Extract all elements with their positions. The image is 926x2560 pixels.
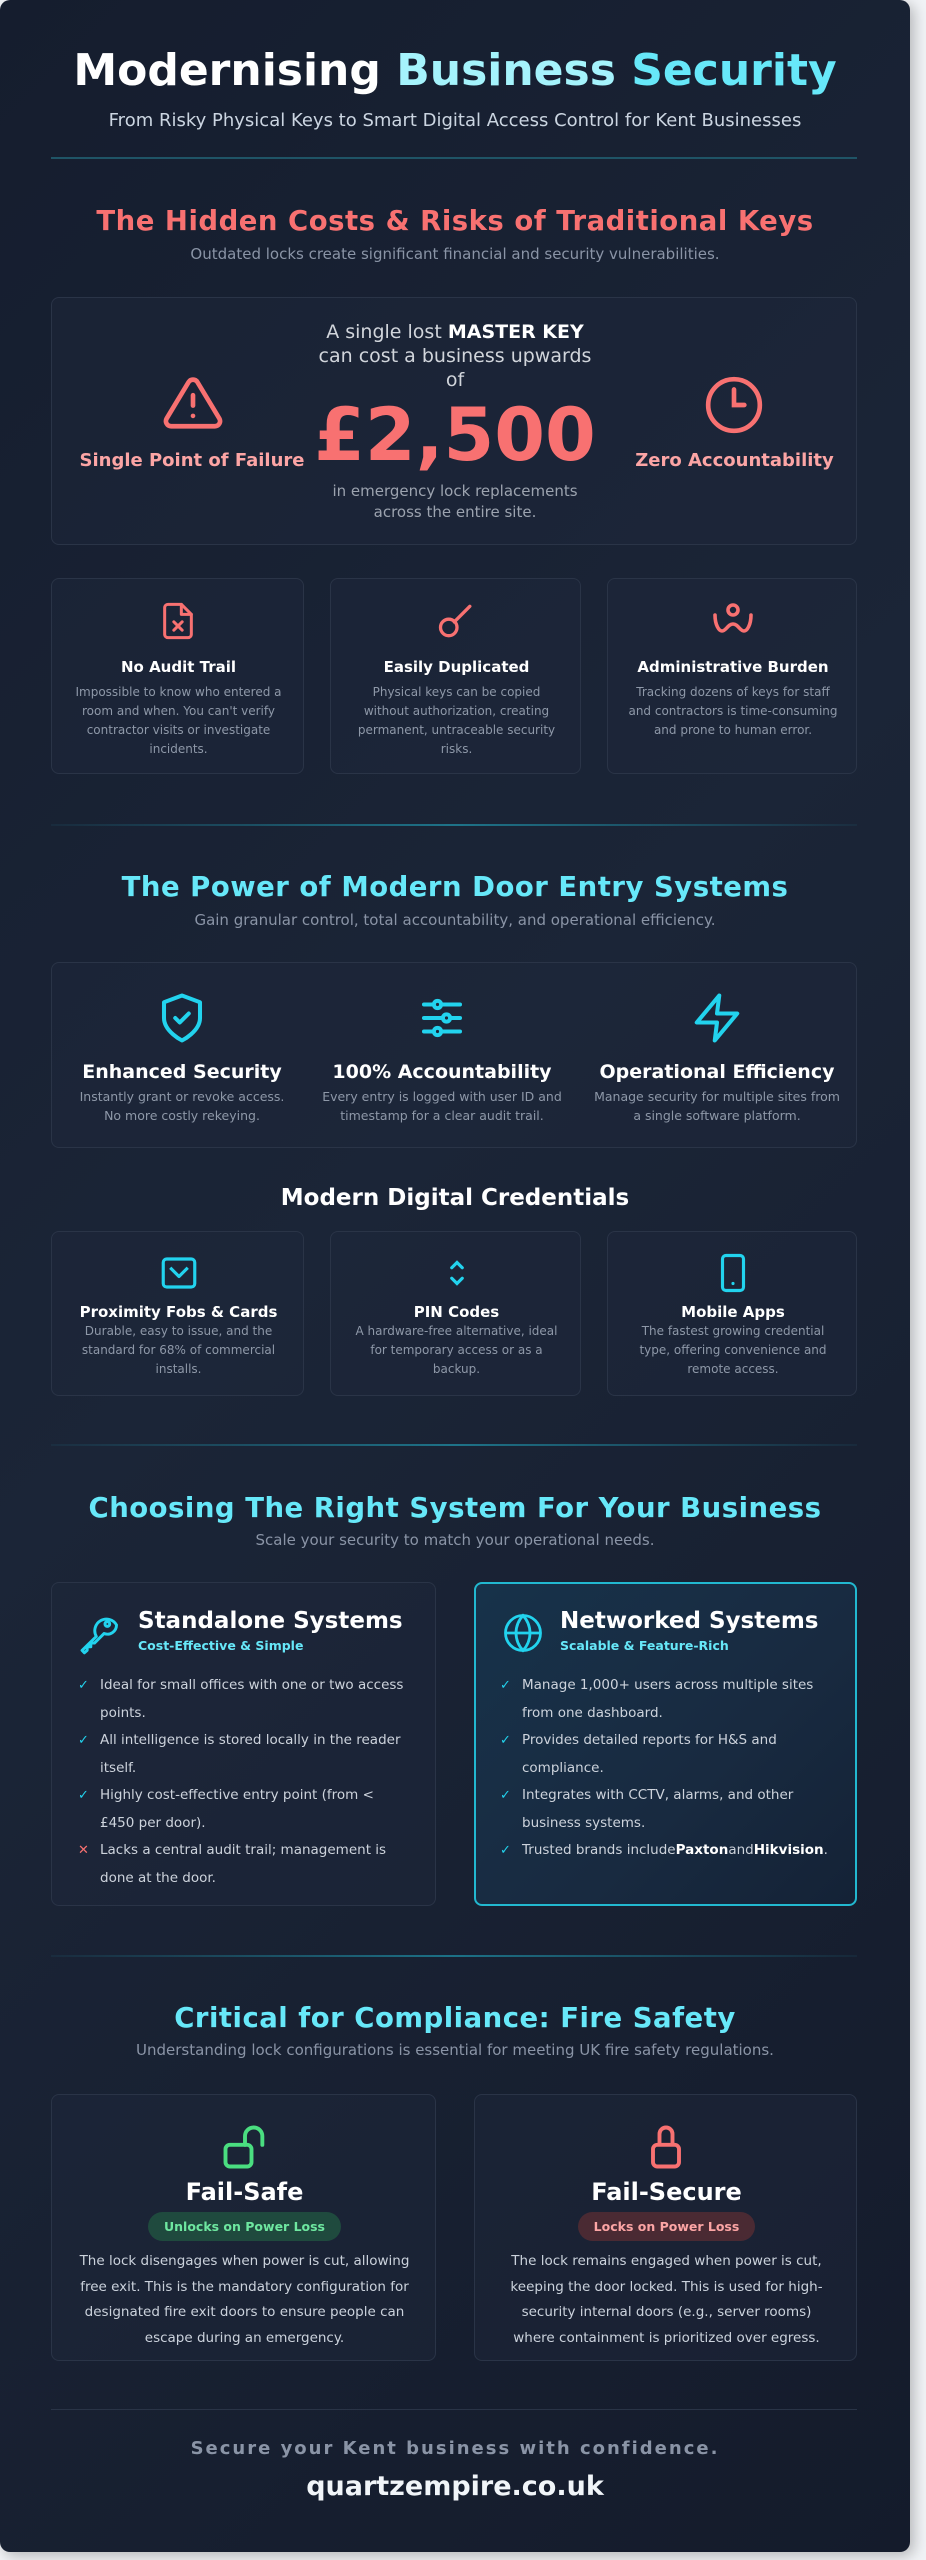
- card: PIN: PIN Codes: [414, 1303, 499, 1321]
- panel: fail-secure: [474, 2094, 857, 2361]
- icon: card: [162, 1257, 196, 1289]
- footer url: quartzempire.co.uk: [306, 2471, 604, 2502]
- card: no audit trail: [51, 578, 304, 774]
- list: networked features: [500, 1677, 828, 1858]
- panel: benefits: [51, 962, 857, 1148]
- benefit: efficiency: a single software platform.: [633, 1108, 801, 1123]
- card: fobs: [51, 1231, 304, 1396]
- icon: locked padlock: [651, 2126, 681, 2168]
- benefit: efficiency: [594, 994, 840, 1123]
- icon: person: [713, 603, 753, 633]
- heading: digital credentials: Modern Digital Credentials: [281, 1185, 629, 1211]
- card: no audit trail: Impossible to know who entered a room and when. You can't verify contractor visits or investigate incidents.: [75, 685, 282, 756]
- list: standalone features: Lacks a central audit trail; management is done at the door.: [100, 1842, 386, 1886]
- subtitle: From Risky Physical Keys to Smart Digital Access Control for Kent Businesses: [109, 110, 801, 131]
- benefit: efficiency: Operational Efficiency: [600, 1061, 834, 1083]
- list: networked features: Trusted brands includePaxtonandHikvision.: [522, 1842, 828, 1858]
- card: no audit trail: No Audit Trail: [121, 658, 236, 676]
- panel: fail-safe: The lock disengages when power is cut, allowing free exit. This is the mandatory configuration for designated fire exit doors to ensure people can escape during an emergency.: [80, 2253, 409, 2346]
- panel: fail-secure: Fail-Secure: [591, 2178, 742, 2206]
- icon: globe: [504, 1614, 542, 1652]
- list: networked features: ✓: [500, 1843, 511, 1858]
- panel: networked: Networked Systems: [560, 1608, 818, 1634]
- heading: hidden costs: The Hidden Costs & Risks of Traditional Keys: [96, 205, 814, 237]
- benefit: enhanced security: [80, 994, 284, 1123]
- title: Modernising Business Security: [73, 45, 837, 96]
- icon: clock: [706, 376, 762, 434]
- icon: key: [80, 1618, 118, 1654]
- card: easily duplicated: [330, 578, 581, 774]
- panel: networked: [474, 1582, 857, 1906]
- card: easily duplicated: Easily Duplicated: [384, 658, 529, 676]
- subheading: Gain granular control, total accountability, and operational efficiency.: [194, 911, 716, 929]
- benefit: accountability: 100% Accountability: [332, 1061, 552, 1083]
- benefit: accountability: Every entry is logged with user ID and: [322, 1089, 562, 1104]
- list: networked features: ✓: [500, 1788, 511, 1803]
- benefit: enhanced security: Instantly grant or revoke access.: [80, 1089, 284, 1104]
- list: networked features: ✓: [500, 1733, 511, 1748]
- footer tagline: Secure your Kent business with confidence.: [191, 2438, 719, 2459]
- list: standalone features: ✕: [78, 1843, 89, 1858]
- card: fobs: Proximity Fobs & Cards: [80, 1303, 277, 1321]
- panel: standalone: Cost-Effective & Simple: [138, 1638, 303, 1653]
- list: standalone features: £450 per door).: [100, 1815, 206, 1831]
- list: standalone features: [78, 1677, 403, 1886]
- card: fobs: Durable, easy to issue, and the standard for 68% of commercial installs.: [82, 1324, 275, 1376]
- benefit: accountability: [322, 998, 562, 1123]
- list: networked features: Integrates with CCTV, alarms, and other business systems.: [522, 1787, 793, 1831]
- list: standalone features: ✓: [78, 1678, 89, 1693]
- stat text: A single lost MASTER KEY can cost a business upwards of: [319, 321, 591, 391]
- benefit: accountability: timestamp for a clear audit trail.: [340, 1108, 544, 1123]
- list: networked features: Provides detailed reports for H&S and compliance.: [522, 1732, 777, 1776]
- panel: networked: Scalable & Feature-Rich: [560, 1638, 729, 1653]
- icon: warning: [164, 377, 222, 429]
- panel: fail-secure: The lock remains engaged when power is cut, keeping the door locked. This is used for high-security internal doors (e.g., server rooms) where containment is prioritized over egress.: [510, 2253, 823, 2346]
- heading: choosing system: Choosing The Right System For Your Business: [89, 1492, 821, 1524]
- benefit: enhanced security: No more costly rekeying.: [104, 1108, 260, 1123]
- list: standalone features: Highly cost-effective entry point (from <: [100, 1787, 374, 1803]
- list: standalone features: All intelligence is stored locally in the reader itself.: [100, 1732, 401, 1776]
- stat: £2,500: £2,500: [314, 393, 596, 478]
- heading: power of modern systems: The Power of Modern Door Entry Systems: [122, 871, 788, 903]
- panel: fail-safe: [51, 2094, 436, 2361]
- pill: unlocks on power loss: Unlocks on Power Loss: [164, 2219, 325, 2234]
- pill: unlocks on power loss: [148, 2212, 341, 2241]
- card: mobile: Mobile Apps: [681, 1303, 785, 1321]
- heading: fire safety: Critical for Compliance: Fire Safety: [174, 2002, 736, 2034]
- card: administrative burden: Administrative Burden: [637, 658, 829, 676]
- list: networked features: ✓: [500, 1678, 511, 1693]
- subheading: Scale your security to match your operational needs.: [255, 1531, 655, 1549]
- subheading: Understanding lock configurations is essential for meeting UK fire safety regulations.: [136, 2041, 774, 2059]
- card: mobile: The fastest growing credential type, offering convenience and remote access.: [639, 1324, 827, 1376]
- icon: chevrons: [450, 1260, 464, 1286]
- benefit: efficiency: Manage security for multiple sites from: [594, 1089, 840, 1104]
- pill: locks on power loss: [578, 2212, 755, 2241]
- icon: unlocked padlock: [224, 2126, 264, 2168]
- panel: fail-safe: Fail-Safe: [186, 2178, 303, 2206]
- pill: locks on power loss: Locks on Power Loss: [594, 2219, 739, 2234]
- list: standalone features: ✓: [78, 1788, 89, 1803]
- stat caption: in emergency lock replacements across the entire site.: [332, 482, 578, 521]
- icon: file x: [163, 602, 193, 640]
- list: networked features: Manage 1,000+ users across multiple sites from one dashboard.: [522, 1677, 813, 1721]
- icon: key: [438, 604, 472, 638]
- card: PIN: A hardware-free alternative, ideal for temporary access or as a backup.: [356, 1324, 557, 1376]
- card: easily duplicated: Physical keys can be copied without authorization, creating permanent, untraceable security risks.: [358, 685, 555, 756]
- card: administrative burden: Tracking dozens of keys for staff and contractors is time-consuming and prone to human error.: [628, 685, 838, 737]
- list: standalone features: ✓: [78, 1733, 89, 1748]
- card: PIN: [330, 1231, 581, 1396]
- panel: master key cost: [51, 297, 857, 545]
- panel: standalone: Standalone Systems: [138, 1608, 403, 1634]
- card: mobile: [607, 1231, 857, 1396]
- subheading: hidden costs: Outdated locks create significant financial and security vulnerabilities.: [190, 245, 720, 263]
- list: standalone features: Ideal for small offices with one or two access points.: [100, 1677, 403, 1721]
- benefit: enhanced security: Enhanced Security: [82, 1061, 282, 1083]
- label: single point of failure: Single Point of Failure: [80, 450, 304, 471]
- label: zero accountability: Zero Accountability: [635, 450, 834, 471]
- icon: phone: [720, 1254, 746, 1292]
- card: administrative burden: [607, 578, 857, 774]
- panel: standalone: [51, 1582, 436, 1906]
